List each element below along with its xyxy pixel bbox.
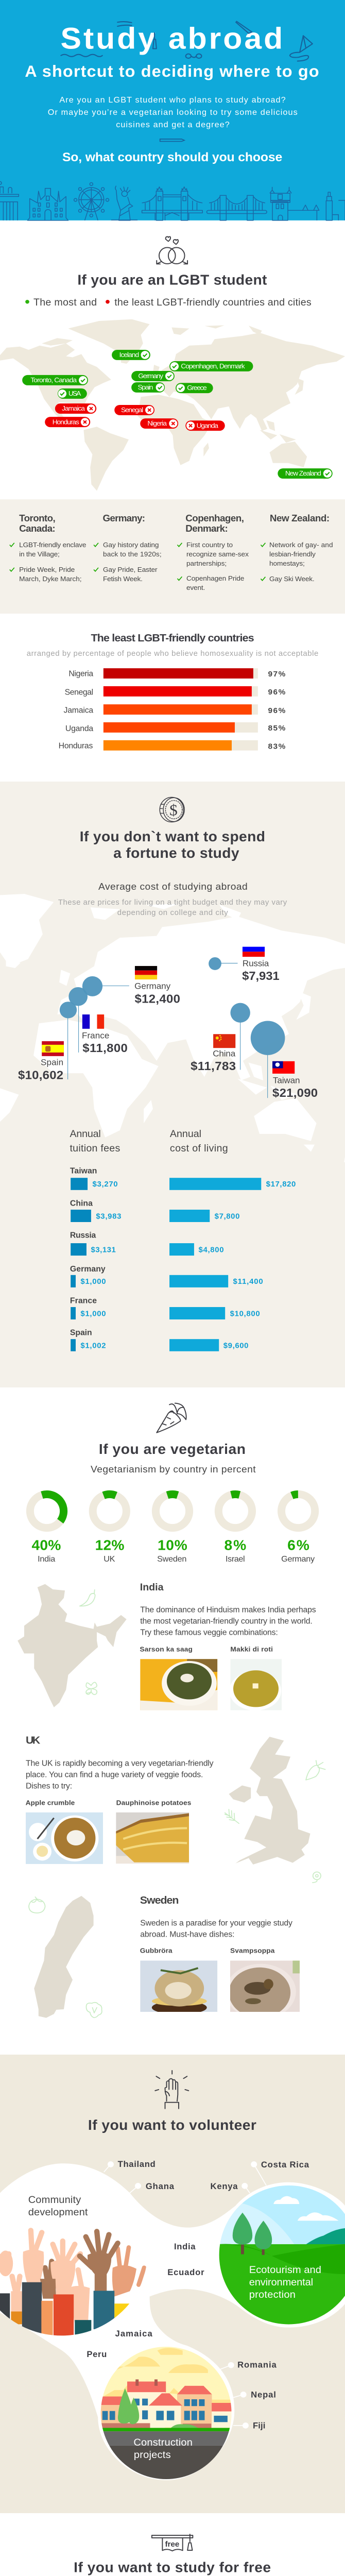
country: Ecuador: Ecuador bbox=[167, 2268, 204, 2277]
question: So, what country should you choose bbox=[62, 150, 282, 164]
column: Germany: back to the 1920s; bbox=[103, 550, 162, 558]
label: construction: Construction bbox=[133, 2437, 193, 2448]
vegetarian heading bbox=[91, 1403, 256, 1475]
dish: Svampsoppa bbox=[230, 1948, 300, 2012]
legend bbox=[25, 297, 312, 308]
tag: Senegal: Senegal bbox=[121, 406, 143, 414]
bar Uganda: Uganda bbox=[65, 724, 94, 733]
label: ecotourism: Ecotourism and bbox=[249, 2264, 321, 2276]
subtitle: A shortcut to deciding where to go bbox=[25, 62, 319, 80]
donut labels: 12% bbox=[95, 1537, 124, 1553]
icon: coin bbox=[160, 797, 184, 822]
donut: UK bbox=[88, 1489, 131, 1533]
country: Kenya: Kenya bbox=[211, 2182, 238, 2191]
note cost: These are prices for living on a tight budget and they may vary bbox=[58, 899, 287, 907]
least friendly heading: The least LGBT-friendly countries bbox=[91, 632, 254, 644]
column headings: cost of living bbox=[170, 1143, 228, 1154]
bar Uganda bbox=[65, 722, 286, 733]
label: ecotourism: protection bbox=[249, 2289, 296, 2300]
icon: tomato bbox=[29, 1897, 45, 1913]
section: LGBT bbox=[0, 236, 345, 751]
section: study for free bbox=[0, 2534, 345, 2576]
tag: Copenhagen bbox=[169, 361, 253, 371]
tag: Greece: Greece bbox=[187, 384, 207, 392]
section: cost bbox=[0, 782, 345, 1387]
column: New Zealand: Network of gay- and bbox=[269, 541, 333, 549]
panel: friendly destinations bbox=[0, 499, 345, 614]
row: Spain: $1,002 bbox=[80, 1342, 106, 1350]
panel background cost bbox=[0, 782, 345, 1387]
tag: Honduras bbox=[45, 417, 90, 427]
marker: France: $11,800 bbox=[82, 1041, 128, 1055]
text India: Try these famous veggie combinations: bbox=[140, 1629, 278, 1637]
marker: Russia: $7,931 bbox=[242, 969, 280, 982]
volunteer panel bbox=[0, 2055, 345, 2513]
title: Study abroad bbox=[61, 21, 283, 55]
text UK: Dishes to try: bbox=[26, 1782, 72, 1790]
hero banner bbox=[0, 0, 345, 221]
text UK: The UK is rapidly becoming a very vegetarian-friendly bbox=[26, 1759, 214, 1768]
row: China: $3,983 bbox=[96, 1213, 121, 1221]
label: ecotourism bbox=[249, 2264, 321, 2300]
icon: clover bbox=[86, 1682, 97, 1694]
column: Germany: Gay Pride, Easter bbox=[103, 566, 158, 573]
donut labels: 6% bbox=[287, 1537, 309, 1553]
bar Senegal bbox=[65, 686, 286, 697]
row: Germany: $1,000 bbox=[80, 1278, 106, 1286]
dish: Apple crumble: Apple crumble bbox=[26, 1799, 75, 1807]
heading free: If you want to study for free bbox=[74, 2560, 271, 2575]
donut labels: 40% bbox=[32, 1537, 61, 1553]
bar Nigeria: Nigeria bbox=[68, 670, 94, 678]
row: China: China bbox=[70, 1199, 93, 1208]
bar Honduras bbox=[59, 740, 286, 751]
bar chart: annual costs bbox=[70, 1128, 296, 1351]
row: China bbox=[70, 1199, 239, 1222]
column: New Zealand bbox=[261, 513, 333, 583]
column: Copenhagen: Copenhagen Pride bbox=[186, 574, 244, 582]
row: France: $1,000 bbox=[80, 1310, 106, 1318]
tag: Jamaica bbox=[55, 403, 96, 414]
label: ecotourism: environmental bbox=[249, 2277, 313, 2288]
construction block bbox=[99, 2346, 277, 2482]
column: New Zealand: New Zealand: bbox=[270, 513, 330, 523]
subheading vegetarian: Vegetarianism by country in percent bbox=[91, 1464, 256, 1475]
map: Sweden bbox=[34, 1896, 94, 2018]
column: Copenhagen: event. bbox=[186, 584, 205, 591]
text Sweden: Sweden is a paradise for your veggie study bbox=[140, 1919, 292, 1927]
marker: Germany: Germany bbox=[134, 981, 171, 991]
column: Copenhagen: First country to bbox=[186, 541, 233, 549]
least friendly heading: arranged by percentage of people who believe homosexuality is not acceptable bbox=[27, 650, 318, 658]
section head LGBT bbox=[25, 236, 312, 308]
column headings bbox=[70, 1128, 228, 1154]
illustration: raised hands bbox=[0, 2230, 144, 2337]
country: India: India bbox=[174, 2242, 196, 2251]
label: community development bbox=[28, 2194, 88, 2218]
tag: Toronto: Toronto, Canada bbox=[30, 376, 77, 384]
icon: raised hand bbox=[155, 2071, 188, 2109]
tag: Spain bbox=[131, 382, 165, 393]
column: Germany bbox=[94, 513, 162, 583]
dish: Gubbröra bbox=[140, 1947, 217, 2014]
country: Peru: Peru bbox=[87, 2350, 107, 2359]
icon: rings and hearts bbox=[157, 236, 187, 264]
country: Nepal bbox=[233, 2391, 276, 2400]
section: vegetarian bbox=[18, 1403, 325, 2019]
text India: the most vegetarian-friendly country in the world. bbox=[140, 1617, 313, 1625]
map: India bbox=[18, 1584, 127, 1707]
text UK bbox=[26, 1759, 214, 1790]
section: volunteer bbox=[0, 2055, 345, 2513]
column: Toronto: Toronto, bbox=[19, 513, 56, 523]
bar Nigeria bbox=[68, 668, 286, 679]
donut labels bbox=[32, 1537, 315, 1564]
label: community development: development bbox=[28, 2207, 88, 2218]
donut labels: UK bbox=[104, 1555, 115, 1564]
note cost: depending on college and city bbox=[117, 909, 228, 917]
country: Thailand bbox=[104, 2160, 156, 2172]
label: construction bbox=[133, 2437, 193, 2461]
text India: The dominance of Hinduism makes India perhaps bbox=[140, 1606, 316, 1614]
bar chart: least friendly bbox=[59, 668, 286, 751]
donut: India bbox=[26, 1490, 68, 1532]
row: Spain bbox=[70, 1329, 248, 1351]
column headings: Annual bbox=[170, 1128, 201, 1140]
column: New Zealand: homestays; bbox=[269, 560, 305, 567]
block: Sweden bbox=[29, 1894, 300, 2019]
white blob connecting programmes bbox=[0, 2163, 345, 2480]
skyline landmarks bbox=[0, 181, 345, 221]
marker: Taiwan: Taiwan bbox=[273, 1076, 300, 1085]
donut labels: Israel bbox=[226, 1555, 245, 1564]
donut labels: 8% bbox=[224, 1537, 246, 1553]
legend: the least LGBT-friendly countries and cities bbox=[114, 297, 312, 308]
country: Jamaica: Jamaica bbox=[115, 2329, 153, 2338]
dish: Sarson ka saag bbox=[140, 1646, 217, 1710]
dish: Gubbröra: Gubbröra bbox=[140, 1947, 173, 1955]
marker: France: France bbox=[82, 1031, 109, 1040]
row: China: $7,800 bbox=[215, 1213, 239, 1221]
row: Russia: Russia bbox=[70, 1231, 96, 1240]
country: Ghana: Ghana bbox=[146, 2182, 175, 2191]
label: construction: projects bbox=[134, 2449, 171, 2461]
text Sweden: abroad. Must-have dishes: bbox=[140, 1930, 235, 1939]
free section intro: free bbox=[165, 2540, 179, 2549]
icon: broccoli bbox=[86, 2003, 102, 2018]
icon: graduation cap with book bbox=[152, 2534, 193, 2551]
row: France: $10,800 bbox=[230, 1310, 260, 1318]
donut charts bbox=[26, 1489, 320, 1533]
icon: flower bbox=[313, 1872, 321, 1883]
row: Germany: Germany bbox=[70, 1265, 106, 1274]
block: India bbox=[18, 1582, 316, 1710]
dish: Makki di roti: Makki di roti bbox=[230, 1646, 273, 1653]
bar Jamaica: Jamaica bbox=[64, 706, 94, 715]
illustration: ecotourism scene bbox=[218, 2184, 345, 2330]
column: Germany: Fetish Week. bbox=[103, 575, 143, 583]
column: Toronto: Canada: bbox=[19, 523, 56, 534]
row: Russia bbox=[70, 1231, 224, 1256]
marker: Spain: Spain bbox=[41, 1058, 63, 1067]
tag: Uganda bbox=[185, 420, 225, 431]
tag: Jamaica: Jamaica bbox=[62, 404, 85, 412]
intro text: Are you an LGBT student who plans to study abroad? bbox=[59, 96, 286, 105]
dish: Makki di roti bbox=[229, 1646, 282, 1710]
heading cost: a fortune to study bbox=[113, 845, 239, 861]
column: Copenhagen: partnerships; bbox=[186, 560, 227, 567]
dish: Dauphinoise potatoes: Dauphinoise potatoes bbox=[116, 1799, 191, 1807]
column: Copenhagen: Copenhagen, bbox=[185, 513, 244, 523]
subheading cost: Average cost of studying abroad bbox=[98, 882, 248, 892]
row: Taiwan bbox=[70, 1167, 296, 1190]
bar Honduras: Honduras bbox=[59, 742, 93, 750]
country: Fiji bbox=[233, 2421, 265, 2431]
tag: Iceland bbox=[112, 350, 150, 360]
country: Kenya bbox=[211, 2182, 250, 2193]
bar Nigeria: 97% bbox=[268, 670, 286, 679]
donut labels: India bbox=[38, 1555, 55, 1564]
donut: Germany bbox=[277, 1489, 320, 1533]
heading Sweden: Sweden bbox=[140, 1894, 179, 1906]
tag: Iceland: Iceland bbox=[119, 351, 139, 359]
row: Germany bbox=[70, 1265, 263, 1287]
tag: New Zealand: New Zealand bbox=[285, 469, 321, 477]
icon: pencil divider bbox=[160, 139, 184, 141]
country: Romania: Romania bbox=[237, 2361, 277, 2370]
intro text bbox=[48, 96, 298, 129]
text India bbox=[140, 1606, 316, 1637]
column: Toronto: March, Dyke March; bbox=[19, 575, 82, 583]
tag: Nigeria bbox=[140, 418, 178, 429]
column headings: Annual bbox=[70, 1128, 101, 1140]
heading UK: UK bbox=[26, 1735, 40, 1747]
dish: Svampsoppa: Svampsoppa bbox=[230, 1947, 275, 1955]
country: Fiji: Fiji bbox=[253, 2421, 265, 2431]
heading LGBT: If you are an LGBT student bbox=[77, 272, 267, 287]
note cost bbox=[58, 899, 287, 917]
tag: Germany: Germany bbox=[138, 372, 163, 380]
column: Copenhagen: Denmark: bbox=[185, 523, 228, 534]
bar Jamaica bbox=[64, 704, 286, 715]
row: France: France bbox=[70, 1297, 97, 1305]
tag: Honduras: Honduras bbox=[53, 418, 79, 426]
row: Taiwan: $3,270 bbox=[92, 1180, 118, 1189]
tag: Copenhagen: Copenhagen, Denmark bbox=[181, 362, 245, 370]
bar Uganda: 85% bbox=[268, 724, 286, 733]
column: Toronto: LGBT-friendly enclave bbox=[19, 541, 87, 549]
label: community development: Community bbox=[28, 2194, 81, 2206]
least friendly heading bbox=[27, 632, 318, 658]
tag: Nigeria: Nigeria bbox=[147, 419, 167, 427]
tag: USA bbox=[58, 388, 87, 399]
marker: Spain: $10,602 bbox=[18, 1069, 63, 1081]
column: Germany: Gay history dating bbox=[103, 541, 159, 549]
marker: France bbox=[68, 987, 128, 1055]
bar Honduras: 83% bbox=[268, 742, 286, 751]
cost heading block: $ bbox=[169, 801, 178, 819]
bar Senegal: Senegal bbox=[65, 688, 93, 697]
country: Costa Rica: Costa Rica bbox=[261, 2160, 309, 2170]
column: New Zealand: lesbian-friendly bbox=[269, 550, 316, 558]
block: UK bbox=[26, 1735, 325, 1883]
tag: Germany bbox=[131, 371, 175, 381]
text UK: place. You can find a huge variety of veggie foods. bbox=[26, 1771, 203, 1779]
icon: carrot bbox=[157, 1403, 186, 1433]
icon: chili bbox=[80, 1590, 95, 1606]
column: New Zealand: Gay Ski Week. bbox=[269, 575, 315, 583]
column headings: tuition fees bbox=[70, 1143, 120, 1154]
volunteer content bbox=[0, 2071, 345, 2480]
heading vegetarian: If you are vegetarian bbox=[99, 1442, 246, 1457]
donut: Israel bbox=[215, 1490, 255, 1532]
text Sweden bbox=[140, 1919, 292, 1939]
free section intro bbox=[19, 2534, 302, 2576]
country: Thailand: Thailand bbox=[118, 2160, 156, 2169]
marker: China bbox=[191, 1003, 250, 1073]
row: Spain: $9,600 bbox=[223, 1342, 248, 1350]
dish: Apple crumble bbox=[26, 1799, 103, 1864]
world map with country tags bbox=[0, 319, 345, 491]
heading cost: If you don`t want to spend bbox=[80, 828, 265, 844]
heading India: India bbox=[140, 1582, 164, 1593]
row: Russia: $4,800 bbox=[198, 1246, 224, 1254]
country: Costa Rica bbox=[251, 2160, 309, 2185]
bar Jamaica: 96% bbox=[268, 706, 286, 715]
column: Copenhagen: recognize same-sex bbox=[186, 550, 249, 558]
row: Taiwan: $17,820 bbox=[266, 1180, 296, 1189]
row: France bbox=[70, 1297, 260, 1319]
country: Ghana bbox=[130, 2182, 175, 2193]
marker: China: China bbox=[213, 1049, 236, 1059]
legend: The most and bbox=[33, 297, 97, 308]
marker: Russia bbox=[209, 942, 280, 982]
column: Copenhagen bbox=[177, 513, 249, 591]
dish: Sarson ka saag: Sarson ka saag bbox=[140, 1646, 193, 1653]
row: Taiwan: Taiwan bbox=[70, 1167, 97, 1175]
marker: Spain bbox=[18, 1002, 77, 1081]
illustration: construction scene bbox=[99, 2346, 235, 2482]
donut: Sweden bbox=[151, 1490, 194, 1532]
tag: Toronto bbox=[22, 375, 88, 385]
tag: USA: USA bbox=[68, 389, 81, 397]
icon: wheat bbox=[225, 1809, 239, 1823]
heading cost bbox=[80, 828, 265, 861]
tag: Spain: Spain bbox=[138, 383, 153, 391]
tag: Uganda: Uganda bbox=[197, 422, 218, 429]
tag: Greece bbox=[176, 383, 213, 393]
tag: Senegal bbox=[114, 405, 154, 415]
column: Toronto: Pride Week, Pride bbox=[19, 566, 75, 573]
heading volunteer: If you want to volunteer bbox=[88, 2117, 256, 2133]
intro text: Or maybe you’re a vegetarian looking to try some delicious bbox=[48, 108, 298, 117]
cost map markers lower bbox=[18, 987, 318, 1351]
marker: Russia: Russia bbox=[243, 959, 269, 968]
donut labels: Germany bbox=[281, 1555, 315, 1564]
cost heading block bbox=[58, 797, 287, 1006]
intro text: cuisines and get a degree? bbox=[116, 121, 230, 129]
bar Senegal: 96% bbox=[268, 688, 286, 697]
donut labels: Sweden bbox=[157, 1555, 186, 1564]
marker: Germany bbox=[82, 966, 180, 1006]
connector dots and country labels bbox=[87, 2160, 309, 2359]
donut labels: 10% bbox=[158, 1537, 187, 1553]
column: Toronto: in the Village; bbox=[19, 550, 60, 558]
country: Romania bbox=[220, 2361, 277, 2370]
icon: turnip bbox=[306, 1760, 325, 1780]
tag: New Zealand bbox=[278, 468, 333, 479]
marker: China: $11,783 bbox=[191, 1059, 236, 1073]
marker: Taiwan bbox=[251, 1021, 318, 1099]
marker: Germany: $12,400 bbox=[135, 992, 180, 1006]
dish: Dauphinoise potatoes bbox=[116, 1799, 191, 1863]
row: Germany: $11,400 bbox=[233, 1278, 263, 1286]
column: Germany: Germany: bbox=[103, 513, 145, 523]
country: Nepal: Nepal bbox=[251, 2391, 276, 2400]
column: Toronto bbox=[10, 513, 87, 583]
world map: cost bbox=[0, 894, 345, 1180]
row: Russia: $3,131 bbox=[91, 1246, 116, 1254]
marker: Taiwan: $21,090 bbox=[272, 1086, 318, 1099]
map: UK bbox=[229, 1737, 310, 1865]
title doodles bbox=[61, 21, 313, 61]
row: Spain: Spain bbox=[70, 1329, 92, 1337]
